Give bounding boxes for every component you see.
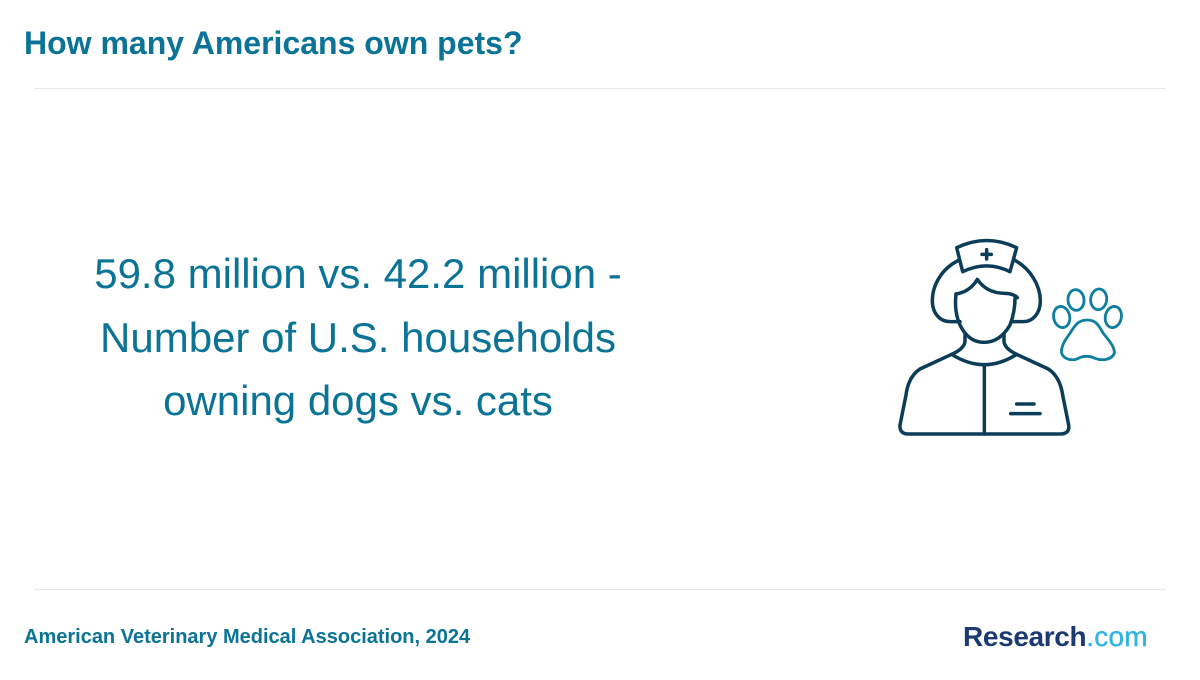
icon: paw — [1052, 288, 1123, 360]
main statistic text: 59.8 million vs. 42.2 million - — [94, 250, 622, 297]
main statistic text — [94, 250, 622, 424]
icon: nurse — [900, 240, 1069, 434]
main statistic text: owning dogs vs. cats — [163, 377, 553, 424]
source citation: American Veterinary Medical Association, 2024 — [24, 626, 470, 648]
main statistic text: Number of U.S. households — [100, 314, 616, 360]
title: How many Americans own pets? — [24, 25, 522, 61]
icon: veterinary nurse with paw — [898, 238, 1123, 436]
logo: Research.com — [963, 621, 1148, 652]
